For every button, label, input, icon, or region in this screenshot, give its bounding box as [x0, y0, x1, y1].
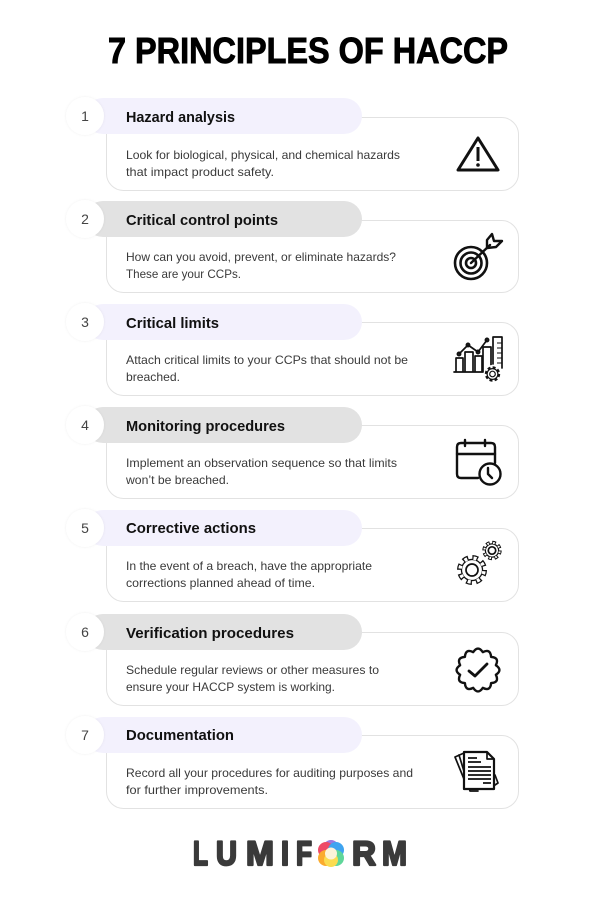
panel: step 6 verification procedures: ensure your HACCP system is working.: [126, 680, 335, 694]
panel: step 5 corrective actions: Corrective actions: [126, 520, 256, 537]
panel: step 2 critical control points: 2: [81, 211, 89, 227]
icon: stacked documents: [455, 752, 498, 791]
logo: Lumiform: F: [296, 835, 312, 873]
panel: step 1 hazard analysis: Look for biological, physical, and chemical hazards: [126, 148, 400, 162]
panel: step 6 verification procedures: Schedule regular reviews or other measures to: [126, 663, 379, 677]
panel: step 2 critical control points: [66, 200, 518, 292]
panel: step 2 critical control points: How can you avoid, prevent, or eliminate hazards?: [126, 250, 396, 264]
logo: Lumiform: U: [216, 835, 237, 873]
panel: step 5 corrective actions: In the event of a breach, have the appropriate: [126, 559, 372, 573]
panel: step 4 monitoring procedures: 4: [81, 417, 89, 433]
icon: calendar with clock: [457, 440, 500, 484]
panel: step 5 corrective actions: [66, 509, 518, 602]
panel: step 7 documentation: 7: [81, 727, 89, 743]
logo: Lumiform: M: [382, 835, 407, 873]
icon: colourful logo O: [318, 840, 344, 867]
panel: step 3 critical limits: breached.: [126, 370, 180, 384]
icon: two outlined gears: [460, 543, 500, 582]
logo: Lumiform: I: [281, 835, 289, 873]
icon: target with arrow: [455, 234, 502, 279]
panel: step 1 hazard analysis: that impact product safety.: [126, 165, 274, 179]
icon: verified badge with check: [457, 649, 499, 691]
panel: step 4 monitoring procedures: Implement an observation sequence so that limits: [126, 456, 397, 470]
panel: step 3 critical limits: 3: [81, 314, 89, 330]
panel: step 6 verification procedures: Verification procedures: [126, 625, 294, 642]
panel: step 7 documentation: Record all your procedures for auditing purposes and: [126, 766, 413, 780]
icon: warning triangle: [458, 138, 498, 170]
logo: Lumiform: R: [352, 835, 376, 873]
panel: step 1 hazard analysis: Hazard analysis: [126, 109, 235, 126]
logo: Lumiform: M: [246, 835, 274, 873]
panel: step 5 corrective actions: 5: [81, 520, 89, 536]
panel: step 1 hazard analysis: 1: [81, 108, 89, 124]
title: 7 PRINCIPLES OF HACCP: [108, 30, 508, 71]
panel: step 4 monitoring procedures: Monitoring procedures: [126, 418, 285, 435]
panel: step 7 documentation: for further improvements.: [126, 783, 268, 797]
panel: step 4 monitoring procedures: [66, 406, 518, 498]
panel: step 7 documentation: Documentation: [126, 727, 234, 744]
panel: step 2 critical control points: Critical control points: [126, 212, 278, 229]
panel: step 3 critical limits: [66, 303, 518, 396]
panel: step 5 corrective actions: corrections planned ahead of time.: [126, 576, 315, 590]
panel: step 6 verification procedures: 6: [81, 624, 89, 640]
panel: step 6 verification procedures: [66, 613, 518, 706]
panel: step 2 critical control points: These are your CCPs.: [126, 267, 241, 281]
panel: step 7 documentation: [66, 716, 518, 808]
icon: bar chart with ruler and gear: [454, 337, 502, 383]
panel: step 1 hazard analysis: [66, 97, 518, 190]
logo: Lumiform: [193, 835, 407, 873]
panel: step 3 critical limits: Critical limits: [126, 315, 219, 332]
panel: step 3 critical limits: Attach critical limits to your CCPs that should not be: [126, 353, 408, 367]
logo: Lumiform: L: [193, 835, 208, 873]
panel: step 4 monitoring procedures: won’t be breached.: [125, 473, 229, 487]
